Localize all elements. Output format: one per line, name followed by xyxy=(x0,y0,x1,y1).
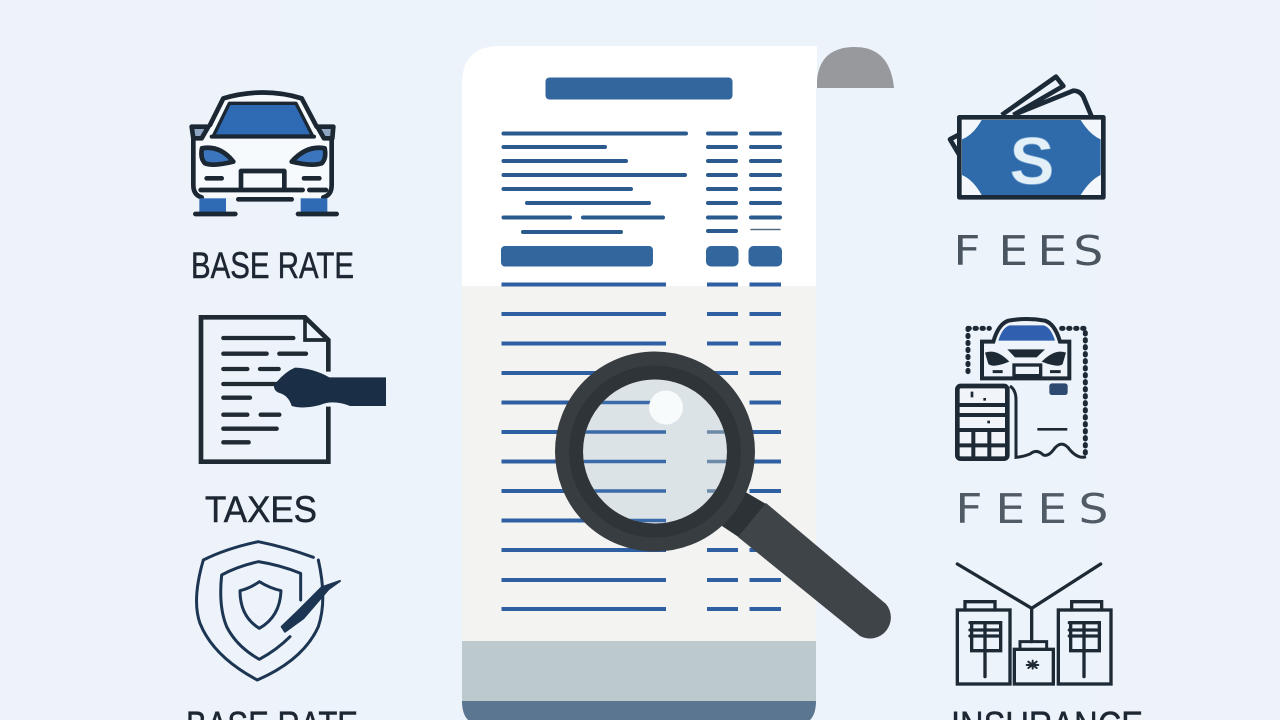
label: base rate: BASE RATE xyxy=(191,245,354,286)
hand xyxy=(274,368,386,407)
item lines, lower section xyxy=(502,284,781,609)
icon: car (base rate) xyxy=(192,92,337,214)
collar xyxy=(722,490,766,538)
infographic canvas xyxy=(188,46,1142,720)
icon: car, calculator and receipt xyxy=(957,319,1086,459)
lens xyxy=(580,376,730,526)
label: taxes: TAXES xyxy=(205,489,317,530)
label: fees (middle): FEES xyxy=(955,486,1108,533)
document title bar xyxy=(546,78,732,100)
car xyxy=(982,319,1069,378)
icon: magnifying glass xyxy=(502,366,891,638)
handle xyxy=(738,503,891,638)
rim xyxy=(569,366,741,538)
page curl xyxy=(817,47,894,88)
lines seen through lens xyxy=(584,400,726,522)
lens highlight xyxy=(649,390,683,424)
subtotal bars xyxy=(501,246,782,266)
icon: buildings and bag (insurance) xyxy=(957,564,1111,684)
dollar S: S xyxy=(1010,125,1054,199)
icon: document with pointing hand (taxes) xyxy=(201,317,386,462)
item lines, upper section xyxy=(504,134,780,232)
panel: bill document xyxy=(462,46,894,720)
receipt xyxy=(1049,383,1068,395)
label: fees (top): FEES xyxy=(953,228,1103,275)
calculator xyxy=(957,386,1007,459)
dotted frame xyxy=(968,328,1085,457)
icon: banknotes xyxy=(950,77,1103,199)
icon: shield with pen xyxy=(197,542,340,680)
document sections xyxy=(462,46,818,720)
